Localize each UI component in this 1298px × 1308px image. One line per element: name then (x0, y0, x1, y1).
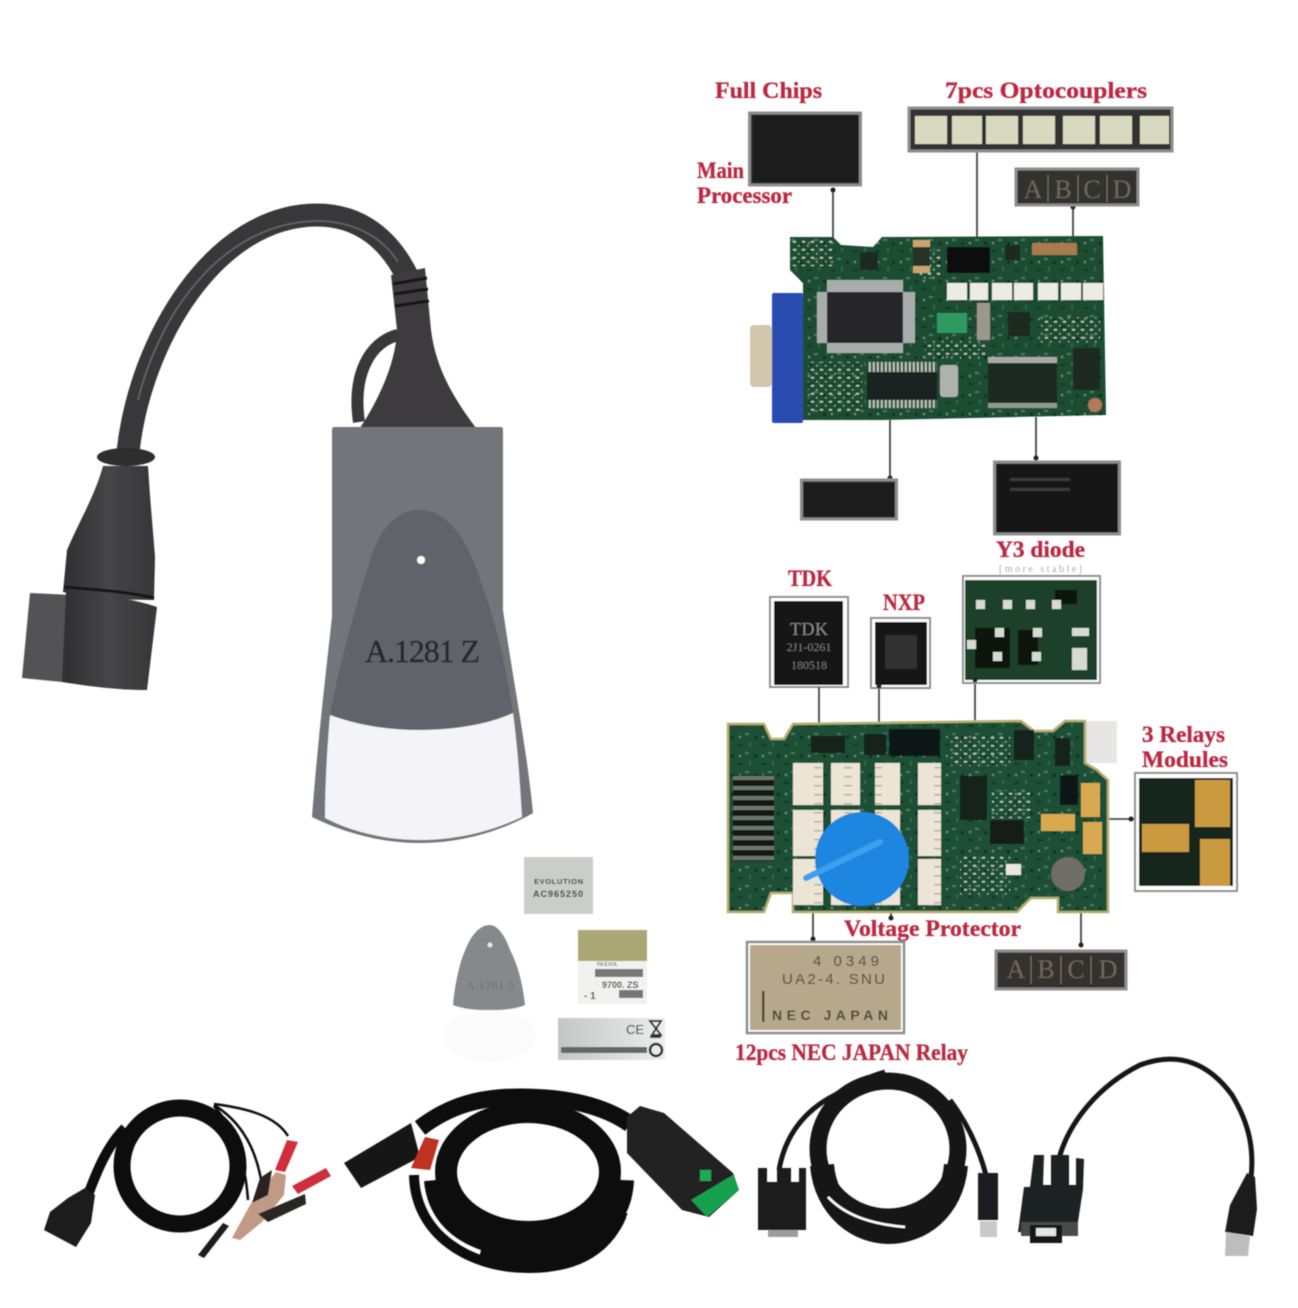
relay marking close-up: NEC JAPAN (772, 1007, 888, 1023)
ABCD marking bottom: A (1007, 955, 1026, 984)
left pin header (733, 775, 774, 861)
accessory label: evolution: AC965250 (533, 889, 583, 899)
round plug (344, 1123, 420, 1188)
red and copper clamps (198, 1140, 331, 1258)
label: 3 Relays Modules (1142, 722, 1228, 772)
DB connector shell (750, 325, 772, 387)
crystal (940, 365, 958, 397)
board (790, 236, 1106, 420)
blue connector (772, 293, 803, 423)
chip: TDK: TDK (790, 619, 828, 639)
accessory: small dome sticker (444, 925, 536, 1062)
relay module close-up (1135, 773, 1237, 891)
pin header (947, 247, 990, 273)
corner pad (1088, 398, 1102, 412)
relay marking close-up: UA2-4. SNU (782, 971, 885, 988)
accessory label: evolution (524, 857, 593, 914)
cable: serial to USB coiled (758, 1072, 998, 1237)
ABCD marking top (1016, 169, 1138, 205)
green OBD connector (627, 1106, 739, 1217)
lower left chip (867, 362, 937, 408)
label: Y3 diode: [more stable] (999, 564, 1082, 575)
solder dots (950, 736, 1032, 895)
chip: NXP (871, 618, 930, 688)
label: Main Processor: Main (697, 158, 744, 183)
optocoupler strip (909, 108, 1172, 151)
label: Main Processor: Processor (697, 183, 792, 208)
ABCD marking top: D (1113, 175, 1131, 204)
label: Y3 diode: Y3 diode (996, 537, 1085, 562)
circuit board two (728, 678, 1134, 948)
board texture (790, 236, 1106, 420)
coil (88, 1104, 288, 1224)
DB9 connector (1018, 1155, 1084, 1243)
OBD plug (44, 1188, 95, 1247)
USB plug (1225, 1173, 1257, 1256)
grey plug connector (22, 448, 157, 690)
right side chip (1073, 348, 1100, 390)
lower right chip (988, 357, 1057, 408)
label: NXP: NXP (883, 590, 925, 615)
chip: TDK (770, 597, 848, 687)
accessory label: barcode sticker (578, 930, 647, 1004)
cable: short serial to USB (1018, 1059, 1257, 1256)
ABCD marking bottom: B (1037, 955, 1055, 984)
chip: Y3 diode close-up (963, 576, 1100, 683)
label: TDK: TDK (788, 566, 832, 591)
chip: main processor (750, 113, 860, 185)
coil (779, 1072, 986, 1232)
ABCD marking bottom (996, 951, 1126, 989)
small white part (1006, 864, 1021, 875)
cable arc (1059, 1059, 1252, 1178)
label: Voltage Protector: Voltage Protector (844, 916, 1021, 941)
label: Full Chips: Full Chips (715, 78, 822, 103)
red sleeve (411, 1137, 439, 1170)
board ABCD mark (1032, 243, 1077, 255)
connector lines board one (830, 148, 1076, 480)
cable strain relief (360, 268, 476, 428)
accessory label: barcode sticker: PA EVOL (597, 962, 618, 968)
USB plug (978, 1173, 998, 1237)
relays: NEC (793, 763, 941, 905)
accessory label: CE rating: CE (626, 1022, 644, 1037)
cable: main OBD to plug (344, 1097, 739, 1268)
relay marking close-up: 4 0349 (813, 953, 879, 970)
top chips (811, 729, 1078, 844)
accessory label: evolution: EVOLUTION (534, 877, 583, 886)
accessory label: barcode sticker: - 1 (584, 991, 596, 1002)
seven optocoupler blocks (947, 283, 1103, 300)
white connector (1085, 721, 1117, 763)
chip: lower large (994, 462, 1120, 534)
label: 12pcs NEC JAPAN Relay: 12pcs NEC JAPAN Relay (735, 1040, 968, 1065)
regulator (937, 303, 990, 340)
device body (312, 427, 533, 843)
label: Y3 diode (996, 537, 1085, 575)
device cable (128, 215, 408, 452)
main processor on board (817, 280, 915, 353)
DB9 connector (758, 1168, 806, 1237)
solder dots (792, 240, 1100, 412)
board texture (730, 723, 1106, 910)
ABCD marking top: C (1083, 175, 1101, 204)
label: Main Processor (697, 158, 792, 208)
accessory label: CE rating (558, 1018, 665, 1060)
chip: TDK: 2J1-0261 (787, 640, 831, 654)
chip: lower small (802, 480, 896, 519)
circuit board one (750, 148, 1106, 480)
inductor (913, 240, 930, 273)
label: 3 Relays Modules: Modules (1142, 747, 1228, 772)
accessory label: barcode sticker: 9700. ZS (602, 980, 639, 990)
cable: OBD with battery clamps (44, 1104, 331, 1258)
white lower panel (325, 713, 522, 840)
status LED (417, 556, 425, 564)
label: 3 Relays Modules: 3 Relays (1142, 722, 1225, 747)
small chips (860, 245, 1030, 336)
connector lines board two (810, 678, 1134, 948)
coil highlight (828, 1197, 905, 1227)
coil (414, 1097, 630, 1268)
model text: A.1281 Z (365, 633, 480, 669)
accessory: small dome sticker: A.1281.5 (466, 978, 514, 992)
chip: TDK: 180518 (791, 658, 827, 672)
inductor (1051, 857, 1085, 891)
ABCD marking bottom: C (1067, 955, 1085, 984)
ABCD marking top: A (1024, 175, 1043, 204)
blue voltage protector (806, 812, 909, 906)
main interface device (22, 215, 533, 843)
relay marking close-up (747, 942, 904, 1033)
yellow capacitors (1041, 783, 1102, 854)
ABCD marking bottom: D (1099, 955, 1117, 984)
board (728, 721, 1108, 912)
ABCD marking top: B (1054, 175, 1072, 204)
dark dome panel (330, 510, 513, 730)
label: 7pcs Optocouplers: 7pcs Optocouplers (945, 78, 1147, 103)
